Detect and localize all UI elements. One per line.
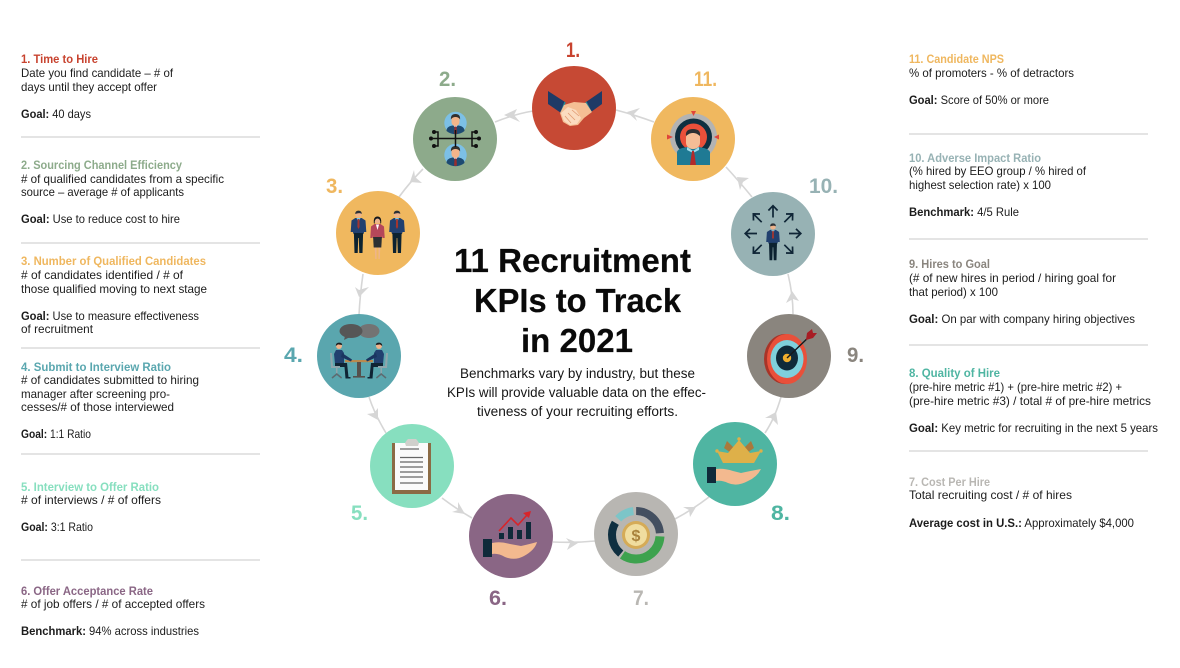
panel: right KPI list	[909, 52, 1158, 530]
heading: Sourcing Channel Efficiency: 2. Sourcing Channel Efficiency	[21, 158, 182, 172]
KPI 7 text: Average cost in U.S.: Approximately $4,000	[909, 516, 1134, 530]
heading: Hires to Goal: 9. Hires to Goal	[909, 257, 990, 271]
KPI 4 text: # of candidates submitted to hiring	[21, 373, 199, 387]
KPI 7 text: Total recruiting cost / # of hires	[909, 488, 1072, 502]
KPI 10 text: Benchmark: 4/5 Rule	[909, 205, 1019, 219]
KPI 2 text: Goal: Use to reduce cost to hire	[21, 212, 180, 226]
number 6: 6.	[489, 587, 507, 610]
KPI 10 text	[909, 151, 1087, 219]
KPI 3 text	[21, 254, 207, 336]
KPI 9 text: (# of new hires in period / hiring goal for	[909, 271, 1116, 285]
heading: Interview to Offer Ratio: 5. Interview to Offer Ratio	[21, 480, 159, 494]
KPI 1 text	[21, 52, 174, 121]
heading: Cost Per Hire: 7. Cost Per Hire	[909, 475, 990, 489]
KPI 4 text: Goal: 1:1 Ratio	[21, 427, 91, 441]
number 3: 3.	[326, 175, 343, 198]
KPI 9 text	[909, 257, 1135, 326]
KPI node 10: adverse impact directions	[731, 192, 815, 276]
KPI node 2: sourcing network	[413, 97, 497, 181]
center subtitle: KPIs will provide valuable data on the effec-	[447, 385, 706, 400]
KPI 6 text	[21, 584, 205, 638]
number 9: 9.	[847, 344, 864, 367]
number 10: 10.	[809, 175, 838, 198]
number 11: 11.	[694, 68, 717, 91]
KPI 1 text: Date you find candidate – # of	[21, 66, 174, 80]
center title: KPIs to Track	[474, 283, 681, 320]
KPI 6 text: Benchmark: 94% across industries	[21, 624, 199, 638]
KPI 11 text: % of promoters - % of detractors	[909, 66, 1074, 80]
KPI 11 text: Goal: Score of 50% or more	[909, 93, 1049, 107]
KPI node 8: crown in hand	[693, 422, 777, 506]
KPI node 4: interview	[317, 314, 401, 398]
center subtitle	[447, 366, 706, 419]
number 8: 8.	[771, 502, 790, 525]
KPI 3 text: # of candidates identified / # of	[21, 268, 184, 282]
KPI 5 text: # of interviews / # of offers	[21, 493, 161, 507]
KPI 4 text: manager after screening pro-	[21, 387, 170, 401]
heading: Adverse Impact Ratio: 10. Adverse Impact Ratio	[909, 151, 1041, 165]
number 7: 7.	[633, 587, 649, 610]
number 4: 4.	[284, 344, 303, 367]
center subtitle: tiveness of your recruiting efforts.	[477, 404, 678, 419]
KPI node 7: cost donut	[594, 492, 678, 576]
center subtitle: Benchmarks vary by industry, but these	[460, 366, 695, 381]
KPI 3 text: Goal: Use to measure effectiveness	[21, 309, 199, 323]
heading: Offer Acceptance Rate: 6. Offer Acceptance Rate	[21, 584, 153, 598]
arrows: cycle connecting the KPI circles	[355, 108, 799, 550]
KPI 2 text: source – average # of applicants	[21, 185, 184, 199]
KPI 7 text	[909, 475, 1134, 530]
heading: Time to Hire: 1. Time to Hire	[21, 52, 98, 66]
heading: Submit to Interview Ratio: 4. Submit to Interview Ratio	[21, 360, 171, 374]
KPI 3 text: of recruitment	[21, 322, 94, 336]
KPI 10 text: highest selection rate) x 100	[909, 178, 1051, 192]
KPI node 9: target	[747, 314, 831, 398]
KPI 8 text: (pre-hire metric #3) / total # of pre-hire metrics	[909, 394, 1151, 408]
KPI 1 text: days until they accept offer	[21, 80, 157, 94]
KPI node 7: cost donut: $	[632, 528, 641, 545]
KPI 10 text: (% hired by EEO group / % hired of	[909, 164, 1087, 178]
KPI 9 text: Goal: On par with company hiring objectives	[909, 312, 1135, 326]
KPI 11 text	[909, 52, 1074, 107]
KPI node 3: candidates	[336, 191, 420, 275]
KPI 5 text	[21, 480, 161, 534]
center title	[454, 243, 691, 360]
KPI 1 text: Goal: 40 days	[21, 107, 91, 121]
center title: in 2021	[521, 323, 633, 360]
KPI 4 text	[21, 360, 199, 441]
center title: 11 Recruitment	[454, 243, 691, 280]
KPI 5 text: Goal: 3:1 Ratio	[21, 520, 93, 534]
KPI node 5: clipboard	[370, 424, 454, 508]
KPI 2 text	[21, 158, 224, 226]
number 1: 1.	[566, 39, 580, 62]
heading: Number of Qualified Candidates: 3. Number of Qualified Candidates	[21, 254, 206, 268]
KPI 9 text: that period) x 100	[909, 285, 998, 299]
heading: Quality of Hire: 8. Quality of Hire	[909, 366, 1000, 380]
KPI 8 text: Goal: Key metric for recruiting in the next 5 years	[909, 421, 1158, 435]
KPI 8 text: (pre-hire metric #1) + (pre-hire metric #2) +	[909, 380, 1122, 394]
KPI node 1: handshake	[532, 66, 616, 150]
KPI 6 text: # of job offers / # of accepted offers	[21, 597, 205, 611]
KPI node 6: growth in hand	[469, 494, 553, 578]
panel: left KPI list	[21, 52, 260, 638]
KPI 4 text: cesses/# of those interviewed	[21, 400, 174, 414]
number 2: 2.	[439, 68, 456, 91]
KPI 2 text: # of qualified candidates from a specific	[21, 172, 224, 186]
KPI node 11: candidate satisfaction	[651, 97, 735, 181]
number 5: 5.	[351, 502, 368, 525]
KPI 8 text	[909, 366, 1158, 435]
KPI 3 text: those qualified moving to next stage	[21, 282, 207, 296]
heading: Candidate NPS: 11. Candidate NPS	[909, 52, 1004, 66]
